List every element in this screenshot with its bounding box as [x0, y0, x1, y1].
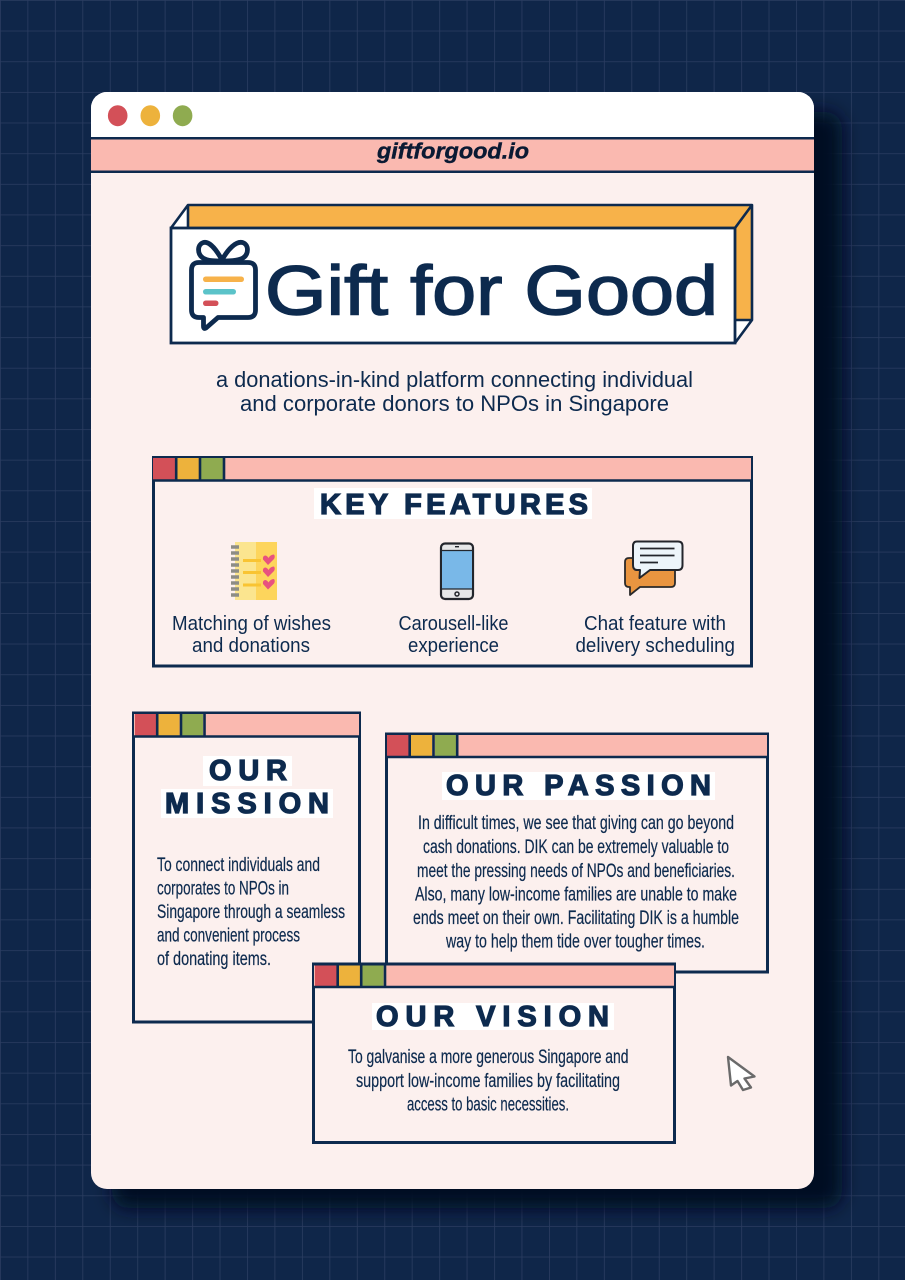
heading: our vision: OUR VISION [376, 1001, 609, 1033]
panel: our vision [314, 964, 675, 1142]
mission text: Singapore through a seamless [157, 902, 345, 923]
mission text: of donating items. [157, 949, 271, 970]
address bar [91, 137, 814, 173]
mission text [157, 855, 345, 970]
label: chat: Chat feature with [584, 613, 726, 635]
passion text: Also, many low-income families are unable to make [415, 884, 737, 906]
3D box back [171, 205, 752, 343]
panel: browser window [91, 92, 814, 1189]
label: carousell: Carousell-like [398, 613, 508, 635]
passion text: meet the pressing needs of NPOs and beneficiaries. [417, 861, 735, 882]
vision text [348, 1047, 628, 1116]
passion text: cash donations. DIK can be extremely valuable to [423, 837, 729, 858]
passion text: ends meet on their own. Facilitating DIK is a humble [413, 908, 739, 929]
vision text: access to basic necessities. [407, 1094, 569, 1116]
logo banner [171, 205, 752, 343]
icon: browser window dots [108, 105, 192, 126]
panel: our passion [386, 734, 768, 972]
vision text: support low-income families by facilitating [356, 1071, 620, 1092]
icon: notebook [231, 542, 277, 600]
icon: gift chat bubble logo [192, 242, 256, 328]
mission text: and convenient process [157, 926, 300, 946]
mission text: To connect individuals and [157, 855, 320, 876]
label: matching: and donations [192, 635, 310, 657]
label: matching [172, 613, 331, 657]
passion text [413, 813, 739, 952]
label: matching: Matching of wishes [172, 613, 331, 635]
label: carousell: experience [408, 635, 499, 657]
label: chat: delivery scheduling [576, 635, 735, 657]
passion text: In difficult times, we see that giving can go beyond [418, 813, 734, 834]
address bar: giftforgood.io [376, 138, 529, 164]
icon: mouse cursor [728, 1057, 754, 1090]
label: chat [576, 613, 735, 657]
tagline: and corporate donors to NPOs in Singapore [240, 391, 669, 416]
heading: our mission: OUR [209, 755, 287, 787]
heading: key features: KEY FEATURES [320, 489, 588, 521]
logo wordmark: Gift for Good [265, 252, 718, 330]
icon: chat bubbles [625, 542, 682, 595]
mission text: corporates to NPOs in [157, 878, 289, 900]
heading: our mission [161, 755, 333, 820]
panel: key features [153, 458, 752, 666]
heading: our passion: OUR PASSION [446, 770, 711, 802]
passion text: way to help them tide over tougher times. [445, 932, 705, 952]
tagline [216, 367, 693, 416]
label: carousell [398, 613, 508, 657]
panel: our mission [134, 713, 360, 1022]
heading: our mission: MISSION [165, 788, 329, 820]
vision text: To galvanise a more generous Singapore and [348, 1047, 628, 1068]
icon: smartphone [441, 544, 473, 599]
tagline: a donations-in-kind platform connecting individual [216, 367, 693, 392]
